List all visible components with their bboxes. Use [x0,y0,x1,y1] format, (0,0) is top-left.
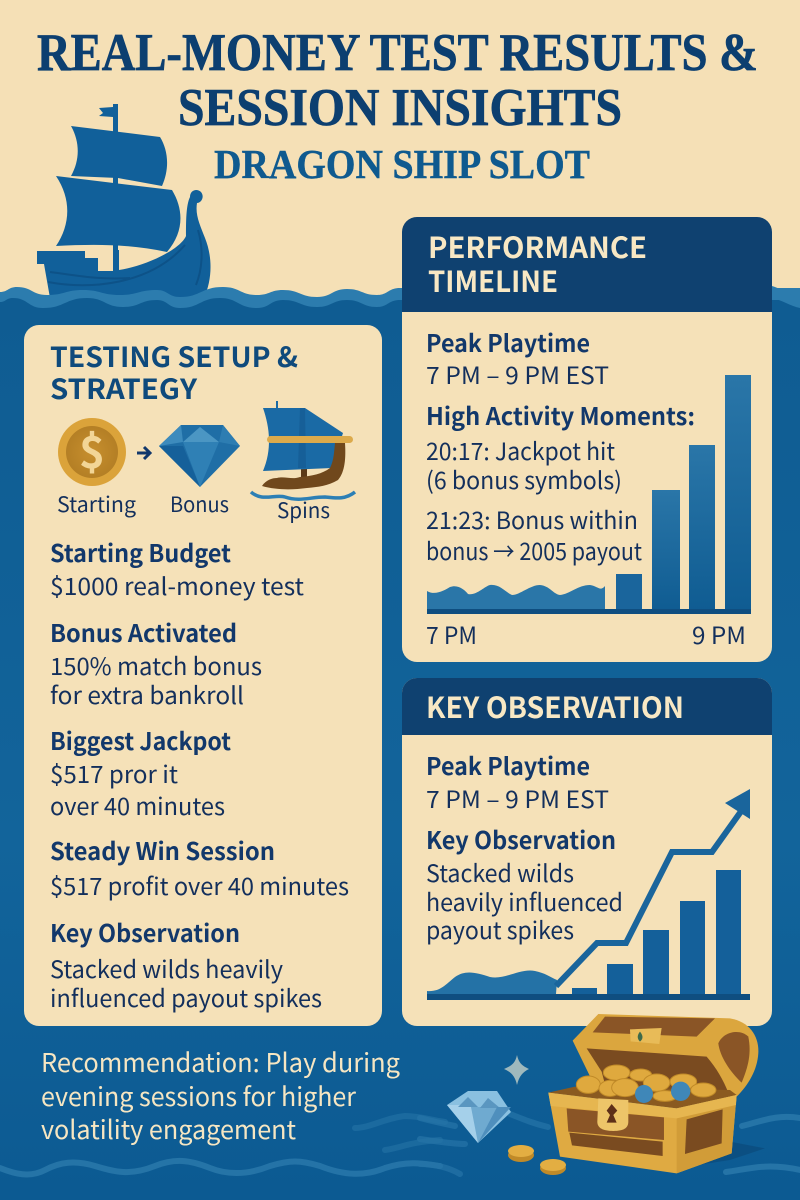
high activity moments: 20:17: Jackpot hit [426,432,615,467]
icon: small ship [251,401,355,499]
chest shadow [687,1142,765,1167]
icon: treasure chest [548,1014,765,1173]
axis labels: 7 PM [426,616,477,651]
high activity moments [426,397,695,567]
header [402,217,772,312]
bonus activated: for extra bankroll [50,676,244,711]
panel: performance timeline [402,217,772,662]
biggest jackpot [50,722,231,822]
recommendation: evening sessions for higher [41,1077,357,1114]
icon labels: Bonus [170,489,229,519]
arrow [137,447,150,459]
key observation text: Stacked wilds [426,854,574,889]
peak playtime [426,324,609,391]
heading: TIMELINE [428,259,558,301]
recommendation: Recommendation: Play during [41,1043,400,1080]
heading: TESTING SETUP & [50,336,298,376]
heading: KEY OBSERVATION [426,685,684,727]
peak playtime: 7 PM – 9 PM EST [426,356,609,391]
starting budget: Starting Budget [50,534,231,569]
biggest jackpot: over 40 minutes [50,787,225,822]
starting budget [50,534,304,602]
steady win session [50,832,349,902]
biggest jackpot: Biggest Jackpot [50,722,231,757]
icon: dollar coin [58,417,126,486]
key observation text: heavily influenced [426,883,623,918]
axis labels: 9 PM [692,616,746,651]
title: SESSION INSIGHTS [178,79,622,137]
chest lid [573,1014,758,1097]
trend arrow [556,789,750,986]
key observation: Stacked wilds heavily [50,950,283,985]
biggest jackpot: $517 pror it [50,755,178,790]
panel: key observation [402,678,772,1026]
title [37,24,758,137]
peak playtime [426,747,609,815]
heading: PERFORMANCE [428,225,647,267]
decorative waves [0,1114,800,1174]
loose coins [508,1145,566,1175]
sea [0,286,800,1200]
peak playtime: Peak Playtime [426,324,590,359]
high activity moments: (6 bonus symbols) [426,461,622,496]
bonus activated: 150% match bonus [50,647,262,682]
icon: dollar coin: $ [79,417,105,481]
heading [50,336,298,408]
key observation text: payout spikes [426,911,574,946]
header [402,678,772,735]
starting budget: $1000 real-money test [50,567,304,602]
recommendation: volatility engagement [41,1110,296,1147]
icon: viking ship [37,104,211,298]
coins and gems [576,1065,716,1101]
bonus activated: Bonus Activated [50,614,237,649]
recommendation [41,1043,400,1147]
panel: testing setup and strategy [24,325,382,1026]
icon labels: Spins [277,495,330,525]
heading [428,225,647,301]
subtitle: DRAGON SHIP SLOT [214,141,590,187]
axis labels [426,616,746,651]
icon labels [57,489,330,525]
steady win session: $517 profit over 40 minutes [50,867,349,902]
bonus activated [50,614,262,711]
bar chart: timeline [427,375,751,614]
high activity moments: 21:23: Bonus within [426,501,638,536]
key observation text [426,821,623,946]
icon: pale diamond [447,1091,511,1143]
key observation: influenced payout spikes [50,979,322,1014]
high activity moments: High Activity Moments: [426,397,695,432]
peak playtime: Peak Playtime [426,747,590,782]
icon: diamond [159,425,240,487]
icon: sparkle [504,1055,529,1085]
steady win session: Steady Win Session [50,832,275,867]
key observation [50,914,322,1014]
icon labels: Starting [57,489,136,519]
high activity moments: bonus → 2005 payout [426,532,642,567]
chart: payout spikes [427,789,750,1000]
key observation text: Key Observation [426,821,616,856]
chest body [548,1093,737,1173]
key observation: Key Observation [50,914,240,949]
chest inside [548,1087,737,1108]
heading: STRATEGY [50,368,198,408]
peak playtime: 7 PM – 9 PM EST [426,780,609,815]
